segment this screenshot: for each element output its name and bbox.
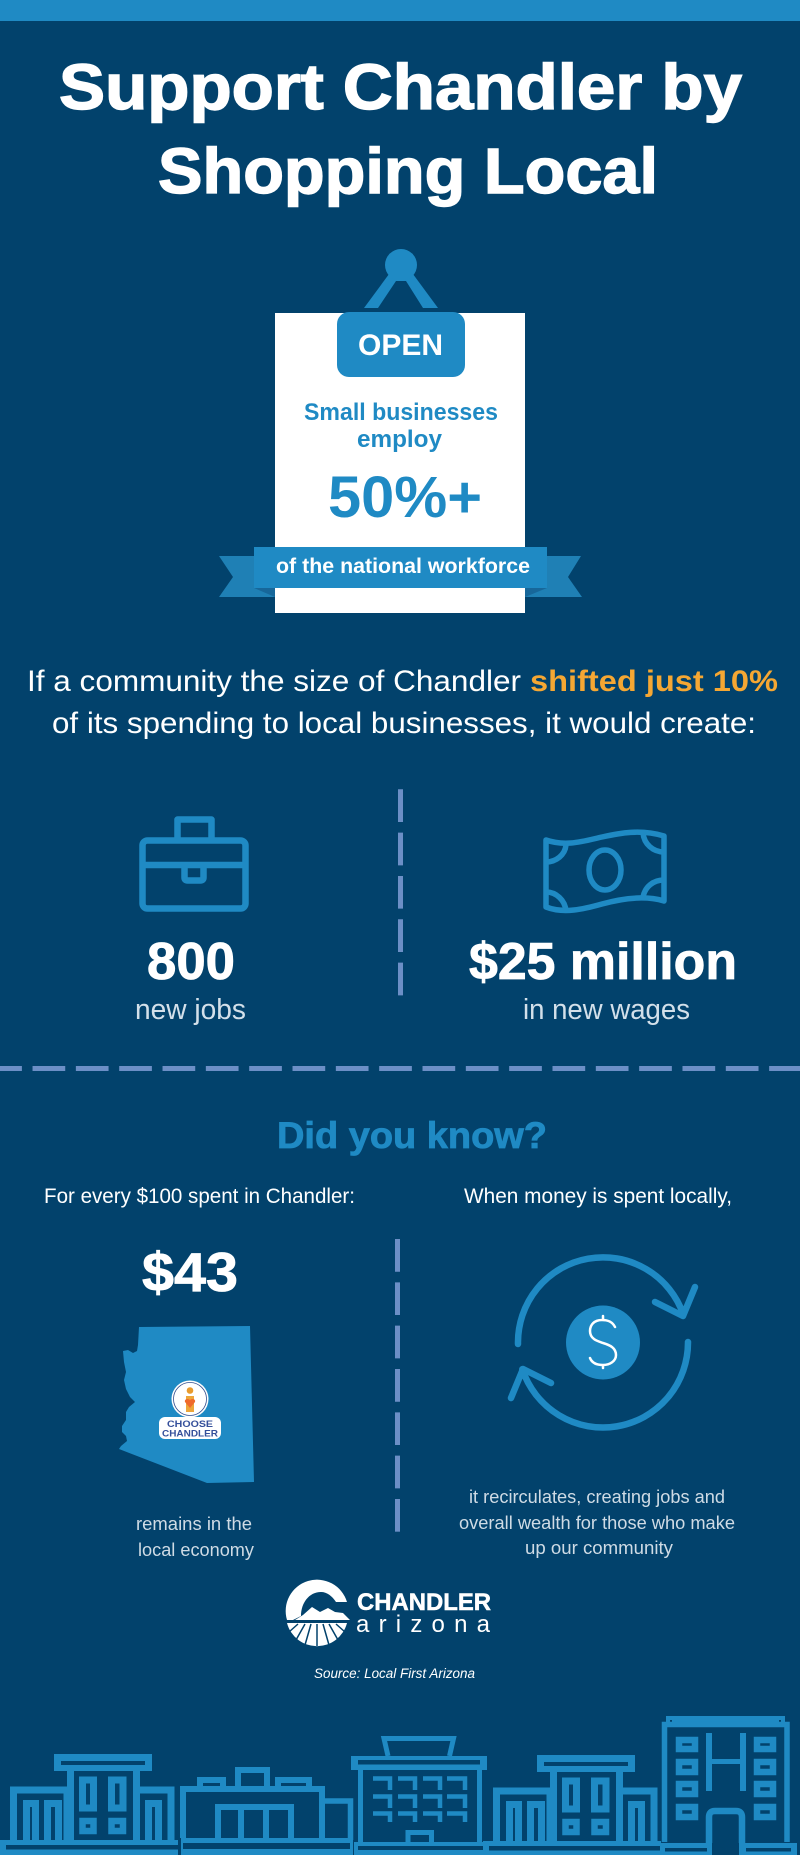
building: office xyxy=(351,1738,487,1855)
top bar xyxy=(0,0,800,21)
title: Support Chandler by xyxy=(59,51,742,123)
right note: overall wealth for those who make xyxy=(459,1513,735,1533)
icon: banknote xyxy=(546,832,664,911)
building: mall xyxy=(181,1770,353,1855)
building: right shop xyxy=(483,1755,661,1855)
sign text: employ xyxy=(357,426,443,453)
figure: $43: $43 xyxy=(142,1241,238,1303)
icon: recirculating money xyxy=(511,1257,695,1428)
panel: left column xyxy=(44,1185,355,1560)
sign text: 50%+ xyxy=(328,465,482,530)
title: Shopping Local xyxy=(158,135,658,207)
panel: right column xyxy=(459,1185,735,1558)
left note xyxy=(136,1514,254,1560)
open tab xyxy=(337,312,465,377)
source: Source: Local First Arizona xyxy=(314,1666,475,1681)
logo: choose chandler: CHOOSE xyxy=(167,1419,213,1430)
open tab: OPEN xyxy=(358,329,443,362)
ribbon: of the national workforce xyxy=(276,555,530,578)
sign text: Small businesses xyxy=(304,399,498,426)
stat: jobs: 800 xyxy=(147,933,235,991)
intro text xyxy=(27,665,778,740)
map: Arizona xyxy=(119,1326,254,1483)
intro text: shifted just 10% xyxy=(530,665,778,698)
right caption: When money is spent locally, xyxy=(464,1185,732,1208)
intro text: of its spending to local businesses, it would create: xyxy=(52,707,756,740)
skyline xyxy=(0,1718,797,1855)
logo: Chandler Arizona: arizona xyxy=(356,1611,491,1638)
stat: jobs xyxy=(135,933,246,1026)
stat: wages: in new wages xyxy=(523,994,690,1026)
stat: jobs: new jobs xyxy=(135,994,246,1026)
panel: open sign xyxy=(219,249,582,613)
building: left shop xyxy=(0,1754,178,1855)
left note: local economy xyxy=(138,1540,254,1560)
heading: did you know: Did you know? xyxy=(277,1115,547,1156)
stat: wages xyxy=(469,933,737,1026)
logo: Chandler Arizona xyxy=(286,1580,491,1646)
title xyxy=(59,51,742,207)
sign text xyxy=(304,399,498,530)
logo: choose chandler: CHANDLER xyxy=(162,1428,218,1440)
intro text: If a community the size of Chandler xyxy=(27,665,521,698)
sign board xyxy=(275,313,525,613)
right note xyxy=(459,1487,735,1558)
logo: choose chandler xyxy=(159,1380,221,1440)
icon: briefcase xyxy=(142,820,246,908)
logo: Chandler Arizona: CHANDLER xyxy=(357,1589,491,1616)
building: hotel xyxy=(660,1718,797,1855)
stat: wages: $25 million xyxy=(469,933,737,991)
right note: up our community xyxy=(525,1538,673,1558)
icon: sign hanger xyxy=(364,249,438,308)
right note: it recirculates, creating jobs and xyxy=(469,1487,725,1507)
left caption: For every $100 spent in Chandler: xyxy=(44,1185,355,1208)
ribbon xyxy=(219,547,582,597)
left note: remains in the xyxy=(136,1514,252,1534)
